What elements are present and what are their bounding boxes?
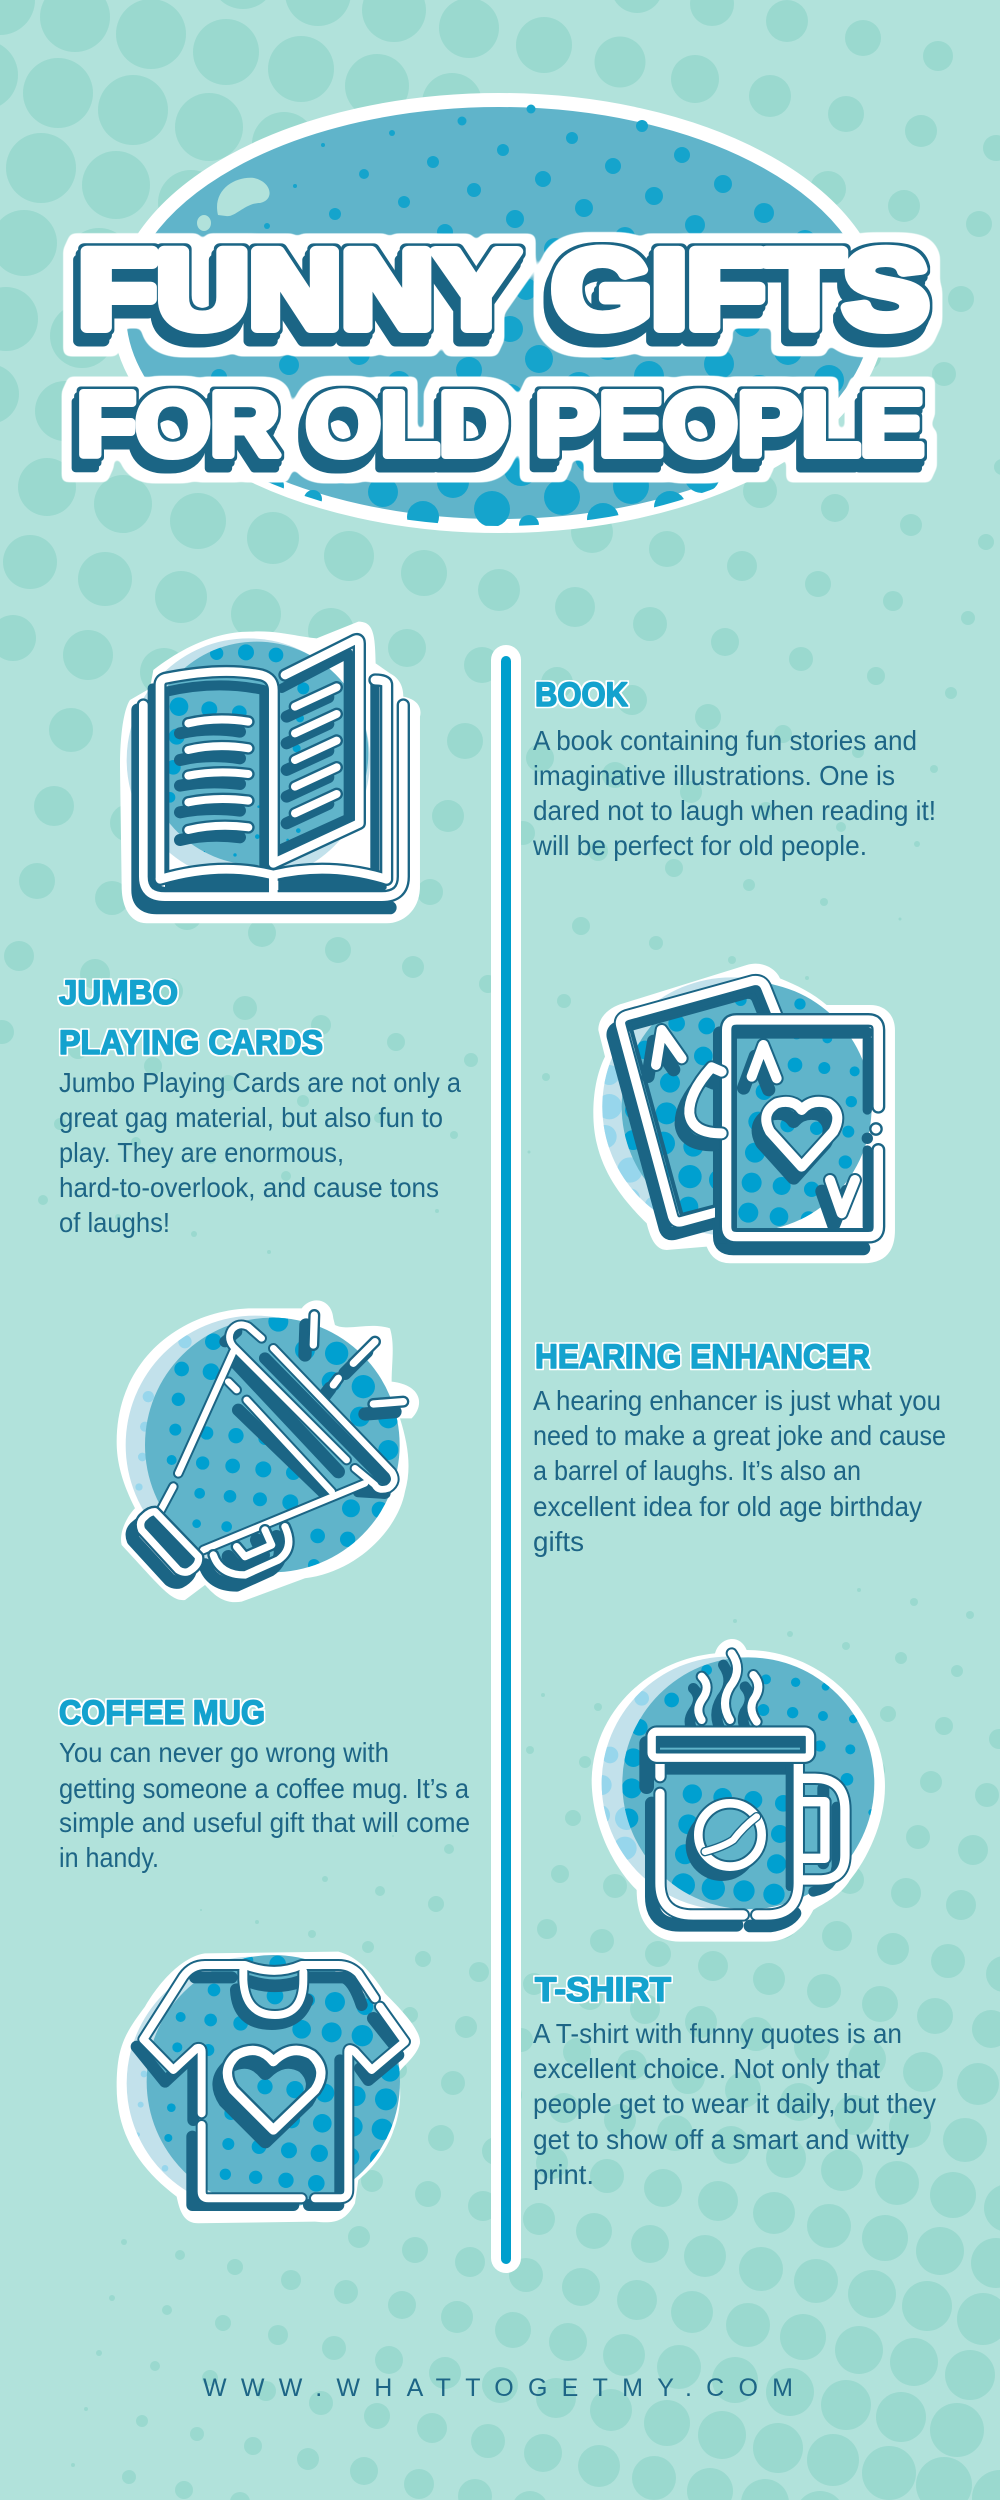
heading: hearing enhancer: HEARING ENHANCER [535,1338,870,1376]
text block: jumbo playing cards [59,1067,461,1238]
text block: jumbo playing cards: Jumbo Playing Cards are not only a [59,1067,461,1098]
footer url: WWW.WHATTOGETMY.COM [203,2374,793,2402]
title: FOR OLD PEOPLE [77,375,924,475]
text block: hearing enhancer: a barrel of laughs. It’s also an [533,1455,861,1486]
text block: hearing enhancer: gifts [533,1526,584,1557]
title [77,228,928,475]
text block: coffee mug [59,1737,470,1873]
text block: t-shirt: get to show off a smart and witty [533,2124,909,2155]
text block: jumbo playing cards: great gag material, but also fun to [59,1102,443,1133]
text block: coffee mug: simple and useful gift that will come [59,1807,470,1838]
text block: jumbo playing cards: play. They are enormous, [59,1137,344,1168]
text block: hearing enhancer: excellent idea for old age birthday [533,1491,922,1522]
text block: jumbo playing cards: hard-to-overlook, and cause tons [59,1172,439,1203]
text block: book: will be perfect for old people. [532,830,867,861]
background dots: top halftone [0,0,1000,1254]
icon: coffee mug [590,1639,885,1942]
heading: jumbo playing cards: PLAYING CARDS [59,1024,323,1062]
heading: jumbo playing cards: JUMBO [59,974,178,1012]
text block: hearing enhancer [533,1385,946,1557]
heading: jumbo playing cards [59,974,323,1062]
icon: open book [120,622,420,923]
title: FUNNY GIFTS [78,228,928,352]
title badge: ellipse with dots [119,100,879,535]
heading: t-shirt: T-SHIRT [535,1971,671,2009]
icon: megaphone [117,1300,419,1602]
text block: t-shirt: excellent choice. Not only that [533,2053,880,2084]
text block: t-shirt: A T-shirt with funny quotes is an [533,2018,902,2049]
background dots: bottom halftone [71,1588,1000,2500]
text block: book: dared not to laugh when reading it! [533,795,936,826]
text block: book: imaginative illustrations. One is [533,760,895,791]
text block: coffee mug: in handy. [59,1842,159,1873]
text block: book: A book containing fun stories and [533,725,917,756]
text block: coffee mug: You can never go wrong with [59,1737,389,1768]
text block: t-shirt: people get to wear it daily, but they [533,2088,936,2119]
icon: t-shirt [117,1952,420,2223]
text block: hearing enhancer: need to make a great joke and cause [533,1420,946,1451]
heading: coffee mug: COFFEE MUG [59,1694,265,1732]
text block: book [532,725,936,861]
text block: t-shirt [533,2018,936,2190]
text block: jumbo playing cards: of laughs! [59,1207,170,1238]
center divider bar [491,645,521,2273]
text block: hearing enhancer: A hearing enhancer is just what you [533,1385,941,1416]
text block: coffee mug: getting someone a coffee mug. It’s a [59,1773,469,1804]
heading: book: BOOK [535,676,628,714]
icon: playing cards [593,964,895,1263]
text block: t-shirt: print. [533,2159,594,2190]
